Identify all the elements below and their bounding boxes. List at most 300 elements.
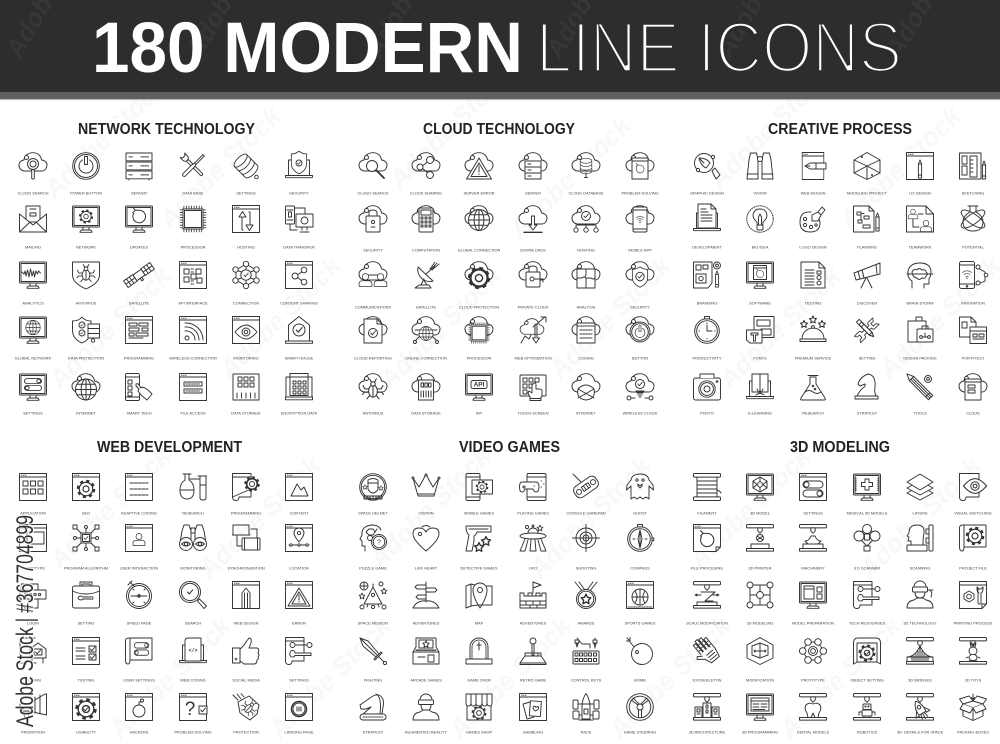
label: content sharing: CONTENT SHARING	[280, 300, 318, 306]
icon: race car	[573, 694, 599, 720]
label: content: CONTENT	[290, 510, 309, 516]
icon: processor	[181, 207, 205, 231]
watermark: diagonal stock marks: Adobe Stock	[702, 60, 838, 195]
icon: 3d architecture	[694, 694, 720, 720]
icon: antivirus cloud	[359, 374, 387, 399]
label: compass: COMPASS	[630, 566, 650, 570]
icon: design packing	[908, 317, 933, 342]
label: connection: CONNECTION	[233, 300, 259, 306]
icon: strategy horse	[360, 694, 386, 720]
icon: synchronization	[232, 525, 260, 550]
label: analysis: ANALYSIS	[577, 304, 596, 310]
label: strategy: STRATEGY	[857, 410, 878, 416]
heading: network technology: NETWORK TECHNOLOGY	[78, 121, 256, 138]
icon: antivirus	[72, 262, 100, 289]
label: downloads: DOWNLOADS	[520, 248, 546, 252]
label: potential: POTENTIAL	[962, 244, 985, 250]
icon: 3d details for space	[906, 694, 934, 723]
label: web design: WEB DESIGN	[801, 190, 826, 196]
icon: speed page	[126, 581, 152, 608]
label: login: LOGIN	[27, 620, 39, 626]
label: synchronization: SYNCHRONIZATION	[227, 566, 265, 570]
icon: programming	[232, 474, 259, 500]
icon: filament	[694, 474, 721, 500]
icon: seo	[72, 474, 100, 500]
icon: game over	[466, 638, 492, 664]
icon: updates	[126, 206, 152, 232]
label: game over: GAME OVER	[467, 678, 491, 682]
icon: exoskeleton	[687, 634, 721, 669]
panel: creative process	[690, 121, 988, 416]
label: location: LOCATION	[289, 566, 309, 570]
label: ufo: UFO	[529, 566, 537, 570]
icon: ghost	[626, 474, 654, 499]
icon: retro game	[520, 638, 546, 664]
label: sketching: SKETCHING	[962, 190, 984, 196]
label: detective games: DETECTIVE GAMES	[461, 566, 498, 570]
label: encryption data: ENCRYPTION DATA	[281, 410, 318, 416]
icon: potential	[959, 206, 987, 231]
label: packing boxes: PACKING BOXES	[957, 730, 989, 734]
label: satellite: SATELLITE	[416, 304, 437, 310]
icon: research flask	[801, 376, 825, 400]
icon: security shield	[626, 262, 654, 287]
icon: teamwork	[906, 206, 934, 232]
icon: problem solving	[180, 694, 207, 720]
label: discover: DISCOVER	[857, 300, 877, 306]
label: tools: TOOLS	[913, 410, 927, 416]
icon: model preparation	[800, 582, 826, 608]
label: dental models: DENTAL MODELS	[797, 730, 830, 734]
label: settings: SETTINGS	[236, 190, 256, 196]
icon: cloud sharing	[412, 153, 440, 178]
label: photo: PHOTO	[700, 410, 714, 416]
icon: space helmet	[360, 474, 386, 500]
watermark: diagonal stock marks: Adobe Stock	[102, 610, 238, 744]
heading: web development: WEB DEVELOPMENT	[97, 439, 242, 456]
icon: usability	[72, 694, 100, 720]
icon: data transfer	[286, 206, 313, 232]
label: cloud protection: CLOUD PROTECTION	[459, 304, 499, 310]
label: server error: SERVER ERROR	[463, 190, 495, 196]
icon: mobile games	[466, 474, 492, 500]
icon: location	[286, 524, 312, 552]
label: portfolio: PORTFOLIO	[962, 356, 984, 360]
icon: scanning	[907, 525, 933, 551]
label: server: SERVER	[525, 190, 541, 196]
watermark: diagonal stock marks: Adobe Stock	[832, 100, 968, 235]
icon: landing page	[286, 694, 312, 720]
label: search: SEARCH	[185, 620, 201, 626]
icon: content	[286, 474, 312, 500]
label: online connection: ONLINE CONNECTION	[405, 356, 447, 360]
icon: problem solving: ?	[185, 699, 195, 720]
icon: 3d modeling	[747, 582, 773, 608]
icon: 3d printer	[746, 524, 774, 551]
label: antivirus: ANTIVIRUS	[76, 300, 97, 306]
label: project file: PROJECT FILE	[959, 566, 987, 570]
label: planning: PLANNING	[857, 244, 877, 250]
icon: web coding	[180, 638, 206, 663]
label: branding: BRANDING	[697, 300, 717, 306]
label: processor: PROCESSOR	[467, 356, 492, 360]
label: private cloud: PRIVATE CLOUD	[518, 304, 549, 310]
icon: server error	[465, 153, 493, 179]
icon: connection	[233, 261, 259, 289]
icon: puzzle game	[360, 525, 386, 551]
label: file procesing: FILE PROCESING	[691, 566, 723, 570]
icon: touch screen	[520, 375, 546, 400]
label: tech resources: TECH RESOURSES	[849, 620, 885, 626]
label: setting: SETTING	[859, 356, 875, 360]
label: software: SOFTWARE	[749, 300, 771, 306]
label: settings: SETTINGS	[289, 678, 309, 682]
label: cloud search: CLOUD SEARCH	[18, 190, 49, 196]
label: user interaction: USER INTERACTION	[120, 566, 158, 570]
label: cloud search: CLOUD SEARCH	[358, 190, 389, 196]
icon: augmented reality	[413, 694, 439, 720]
label: fonts: FONTS	[753, 356, 767, 360]
label: 3d bridges: 3D BRIDGES	[908, 678, 932, 682]
icon: project file	[960, 525, 986, 551]
label: e-learning: E-LEARNING	[748, 410, 772, 416]
label: control keys: CONTROL KEYS	[571, 678, 602, 682]
icon: adventures castle	[520, 582, 546, 608]
label: file access: FILE ACCESS	[180, 410, 206, 416]
label: teamwork: TEAMWORK	[909, 244, 932, 250]
icon: 3d scanner	[854, 524, 880, 551]
icon: setting tools	[854, 318, 879, 343]
icon: mailing	[20, 206, 46, 232]
icon: data protection	[72, 317, 100, 343]
label: brain storm: BRAIN STORM	[907, 300, 933, 306]
icon: coding	[572, 317, 600, 343]
label: prototype: PROTOTYPE	[801, 678, 825, 682]
icon: social media thumb	[232, 638, 259, 664]
watermark: diagonal stock marks: Adobe Stock	[372, 260, 508, 395]
label: 3d technology: 3D TECHNOLOGY	[903, 620, 937, 626]
icon: game steering	[627, 694, 653, 720]
panel: 3d modeling	[686, 439, 993, 734]
icon: logo design	[800, 207, 825, 232]
icon: file processing	[694, 524, 720, 552]
label: network: NETWORK	[76, 244, 96, 250]
icon: downloads	[519, 206, 547, 232]
label: hackers: HACKERS	[130, 730, 149, 734]
label: adventures: ADVENTURES	[520, 620, 547, 626]
heading: cloud technology: CLOUD TECHNOLOGY	[423, 121, 576, 138]
label: cloud: CLOUD	[966, 410, 980, 416]
icon: server	[126, 153, 152, 180]
icon: security laptop	[286, 151, 312, 178]
label: computation: COMPUTATION	[412, 248, 440, 252]
label: sports games: SPORTS GAMES	[624, 620, 656, 626]
label: data base: DATA BASE	[182, 190, 204, 196]
label: monitoring: MONITORING	[180, 566, 206, 570]
icon: scale modification	[694, 582, 720, 608]
label: landing page: LANDING PAGE	[285, 730, 314, 734]
label: error: ERROR	[292, 620, 306, 626]
icon: prototype nodes	[799, 639, 827, 663]
label: button: BUTTON	[632, 356, 648, 360]
label: medical 3d models: MEDICAL 3D MODELS	[847, 510, 888, 516]
icon: cloud search	[359, 153, 387, 178]
label: 3d printer: 3D PRINTER	[748, 566, 772, 570]
icon: layers	[907, 474, 933, 500]
icon: cloud window	[959, 374, 987, 400]
watermark: diagonal stock marks: Adobe Stock	[442, 610, 578, 744]
label: global connection: GLOBAL CONNECTION	[458, 248, 501, 252]
label: satellite: SATELLITE	[129, 300, 150, 306]
label: data transfer: DATA TRANSFER	[283, 244, 315, 250]
icon: web design	[802, 152, 826, 180]
icon: strategy knight	[855, 374, 878, 399]
icon: planning	[854, 206, 879, 232]
icon: brain storm	[907, 263, 933, 288]
label: mailing: MAILING	[25, 244, 41, 250]
heading: creative process: CREATIVE PROCESS	[768, 121, 912, 138]
watermark: diagonal stock marks: Adobe Stock	[712, 260, 848, 395]
icon: adventures signpost	[413, 582, 439, 608]
icon: online connection	[412, 317, 440, 344]
icon: fighting sword	[360, 638, 387, 665]
icon: playing games	[520, 474, 546, 500]
icon: cloud search	[19, 153, 47, 179]
watermark: diagonal stock marks: Adobe Stock	[602, 610, 738, 744]
label: adventures: ADVENTURES	[413, 620, 440, 626]
icon: 3d model	[746, 474, 774, 500]
icon: error	[286, 582, 312, 608]
watermark: diagonal stock marks: Adobe Stock	[42, 440, 178, 575]
icon: global network	[20, 317, 46, 343]
label: security: SECURITY	[289, 190, 309, 196]
label: touch screen: TOUCH SCREEN	[517, 410, 549, 416]
watermark: vertical stock id: Adobe Stock | #367704899	[12, 515, 39, 727]
icon: cloud database	[572, 153, 600, 178]
icon: cloud protection	[465, 262, 493, 288]
icon: premium service	[800, 316, 826, 342]
label: 3d details for space: 3D- DETAILS FOR SPACE	[897, 730, 944, 734]
icon: application	[20, 474, 46, 500]
label: 3d programming: 3D PROGRAMMING	[742, 730, 778, 734]
watermark: diagonal stock marks: Adobe Stock	[502, 110, 638, 245]
icon: packing boxes	[960, 694, 986, 720]
icon: console gamepad	[572, 474, 600, 500]
icon: software	[746, 262, 774, 288]
label: antivirus: ANTIVIRUS	[363, 410, 384, 416]
label: gambling: GAMBLING	[523, 730, 543, 734]
watermark: diagonal stock marks: Adobe Stock	[192, 450, 328, 585]
label: bomb: BOMB	[634, 678, 646, 682]
icon: program algorithm	[73, 525, 99, 551]
label: global network: GLOBAL NETWORK	[15, 356, 52, 360]
label: security: SECURITY	[630, 304, 650, 310]
label: internet: INTERNET	[576, 410, 596, 416]
label: power button: POWER BUTTON	[70, 190, 102, 196]
label: awards: AWARDS	[578, 620, 595, 626]
label: adaptive coding: ADAPTIVE CODING	[121, 510, 157, 516]
panel: network technology	[15, 121, 318, 416]
icon: testing	[801, 262, 825, 288]
label: modeling project: MODELING PROJECT	[847, 190, 888, 196]
icon: crown	[412, 474, 440, 496]
label: 3d scanner: 3 D SCANNER	[854, 566, 880, 570]
label: console gamepad: CONSOLE GAMEPAD	[566, 510, 606, 516]
label: map: MAP	[475, 620, 484, 626]
watermark: diagonal stock marks: Adobe Stock	[212, 250, 348, 385]
watermark: diagonal stock marks: Adobe Stock	[42, 260, 178, 395]
label: data storage: DATA STORAGE	[411, 410, 441, 416]
label: layers: LAYERS	[912, 510, 928, 516]
icon: awards	[575, 582, 597, 608]
icon: modification	[747, 638, 773, 664]
label: problem solving: PROBLEM SOLVING	[621, 190, 659, 196]
icon: robotics	[854, 694, 880, 720]
panel: web development	[20, 439, 314, 734]
icon: bomb	[626, 638, 652, 664]
icon: shooting	[572, 524, 600, 552]
label: 3d toys: 3D TOYS	[965, 678, 982, 682]
label: cloud reporting: CLOUD REPORTING	[354, 356, 392, 360]
label: monitoring: MONITORING	[233, 356, 259, 360]
icon: medical 3d models	[854, 474, 880, 500]
icon: data base tools	[180, 153, 205, 177]
icon: discover telescope	[854, 263, 880, 288]
label: filament: FILAMENT	[697, 510, 717, 516]
label: api: API	[476, 410, 482, 416]
icon: machinery	[800, 524, 826, 551]
icon: web design pencil	[232, 582, 260, 608]
label: settings: SETTINGS	[803, 510, 823, 516]
label: cloud sharing: CLOUD SHARING	[410, 190, 442, 196]
icon: wireless cloud	[626, 374, 654, 400]
icon: research flasks	[180, 474, 206, 500]
icon: modeling project cube	[854, 152, 880, 180]
label: promotion: PROMOTION	[21, 730, 45, 734]
icon: private cloud	[519, 262, 547, 287]
icon: photo	[694, 374, 720, 400]
label: strategy: STRATEGY	[363, 730, 384, 734]
icon: data storage	[233, 374, 259, 400]
label: mobile app: MOBILE APP	[628, 248, 652, 252]
icon: analysis puzzle	[572, 262, 600, 288]
label: robotics: ROBOTICS	[857, 730, 878, 734]
icon: ux design	[906, 152, 934, 180]
label: model preparation: MODEL PREPARATION	[792, 620, 834, 626]
label: premium service: PREMIUM SERVICE	[795, 356, 832, 360]
icon: api monitor	[466, 374, 492, 400]
heading: 3d modeling: 3D MODELING	[790, 439, 890, 456]
icon: branding	[694, 262, 720, 288]
icon: productivity	[695, 316, 719, 343]
title	[92, 9, 902, 88]
watermark: diagonal stock marks: Adobe Stock	[542, 250, 678, 385]
label: space helmet: SPACE HELMET	[358, 510, 389, 516]
icon: content sharing	[286, 262, 312, 288]
label: research: RESEARCH	[802, 410, 824, 416]
icon: smart house	[286, 316, 312, 343]
icon: hosting	[232, 206, 260, 232]
icon: problem solving	[626, 153, 654, 179]
icon: login	[20, 584, 46, 608]
label: protection: PROTECTION	[233, 730, 259, 734]
icon: mobile app	[626, 206, 654, 232]
label: scale modification: SCALE MODIFICATION	[686, 620, 728, 626]
icon: sports games	[626, 582, 654, 608]
label: big idea: BIG IDEA	[752, 244, 769, 250]
icon: hackers	[126, 694, 152, 720]
icon: hosting cloud	[572, 206, 600, 232]
watermark: diagonal stock marks: Adobe Stock	[682, 440, 818, 575]
icon: 3d programming	[746, 694, 774, 720]
label: seo: SEO	[82, 510, 90, 516]
label: ghost: GHOST	[633, 510, 648, 516]
icon: search	[180, 582, 206, 608]
icon: processor cloud	[465, 317, 493, 342]
label: program algorithm: PROGRAM ALGORITHM	[64, 566, 108, 570]
label: innovation: INNOVATION	[961, 300, 985, 306]
icon: settings monitor	[20, 374, 46, 400]
icon: smart tech	[126, 374, 152, 400]
label: mobile games: MOBILE GAMES	[464, 510, 494, 516]
icon: settings cylinder	[232, 152, 260, 180]
icon: vision binoculars	[747, 153, 773, 179]
label: productivity: PRODUCTIVITY	[693, 356, 722, 360]
label: wireless connection: WIRELESS CONNECTION	[169, 356, 217, 360]
icon: wireless connection	[180, 316, 206, 344]
label: space mission: SPACE MISSION	[358, 620, 388, 626]
watermark: diagonal stock marks: Adobe Stock	[522, 450, 658, 585]
label: games shop: GAMES SHOP	[466, 730, 492, 734]
label: fighting: FIGHTING	[364, 678, 382, 682]
icon: graphic design	[694, 154, 720, 179]
icon: analytics	[20, 262, 46, 288]
icon: ufo	[520, 525, 546, 551]
icon: portfolio	[960, 317, 986, 344]
icon: button	[626, 317, 654, 342]
watermark: diagonal stock marks: Adobe Stock	[772, 610, 908, 744]
icon: space mission	[359, 582, 387, 609]
label: modification: MODIFICATION	[746, 678, 774, 682]
icon: programming	[126, 316, 152, 344]
label: vision: VISION	[753, 190, 767, 196]
label: 3d architecture: 3D ARCHITECTURE	[689, 730, 726, 734]
label: data storage: DATA STORAGE	[231, 410, 261, 416]
label: arcade games: ARCADE GAMES	[410, 678, 442, 682]
icon: control keys	[573, 638, 599, 664]
label: smart tech: SMART TECH	[126, 410, 152, 416]
header band	[0, 0, 1000, 100]
label: object setting: OBJECT SETTING	[850, 678, 884, 682]
title: LINE ICONS	[536, 9, 902, 88]
label: race: RACE	[581, 730, 592, 734]
label: cloud database: CLOUD DATABASE	[569, 190, 604, 196]
label: 3d modeling: 3D MODELING	[747, 620, 773, 626]
label: crown: CROWN	[418, 510, 434, 516]
panel: cloud technology	[354, 121, 659, 416]
icon: power button	[73, 153, 99, 179]
label: augmented reality: AUGMENTED REALITY	[405, 730, 447, 734]
icon: settings tools	[286, 638, 312, 664]
icon: arcade games	[413, 638, 439, 664]
watermark: diagonal stock marks: Adobe Stock	[382, 60, 518, 195]
icon: api monitor: API	[474, 382, 485, 388]
label: data protection: DATA PROTECTION	[68, 356, 104, 360]
label: processor: PROCESSOR	[181, 244, 206, 250]
icon: compass	[628, 524, 654, 551]
icon: live heart	[413, 526, 439, 551]
icon: settings toggles	[800, 474, 826, 500]
